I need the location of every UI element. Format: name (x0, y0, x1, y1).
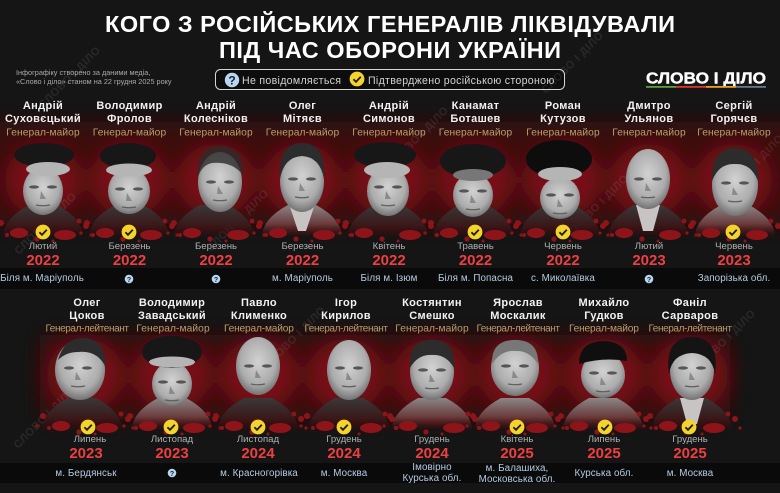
general: Клименко: Листопад (237, 434, 280, 445)
location (479, 463, 555, 485)
portrait (598, 149, 698, 242)
general: Суховєцький (0, 100, 93, 284)
general: Сарваров: м. Москва (667, 468, 714, 479)
general: Суховєцький: Біля м. Маріуполь (0, 273, 84, 284)
general: Горячєв: Червень (715, 241, 753, 252)
general: Кутузов (510, 100, 610, 284)
general: Горячєв: Запорізька обл. (698, 273, 770, 284)
general: Мітяєв (252, 100, 352, 284)
portrait (510, 140, 610, 242)
general: Сарваров (642, 297, 742, 479)
general: Кирилов: 2024 (327, 445, 361, 462)
general: Боташев (423, 100, 523, 284)
red blood background: top row (0, 122, 780, 224)
portrait (553, 341, 653, 436)
general: Кирилов: Генерал-лейтенант (304, 324, 388, 334)
general: Симонов: Генерал-майор (352, 128, 426, 138)
general: Колесніков: 2022 (199, 252, 233, 269)
location: Курська обл. (403, 473, 461, 484)
general: Симонов: Квітень (373, 241, 405, 252)
general: Кутузов: Кутузов (540, 113, 586, 125)
general: Суховєцький: Генерал-майор (6, 128, 80, 138)
location strip: bottom row (0, 463, 780, 483)
watermarks: СЛОВО І ДІЛО (539, 29, 606, 96)
confirmed icon (251, 420, 265, 434)
portrait (166, 146, 266, 242)
general: Боташев: Біля м. Попасна (438, 273, 513, 284)
confirmed icon (726, 225, 740, 239)
general: Мітяєв: 2022 (286, 252, 319, 269)
general: Сарваров: 2025 (673, 445, 707, 462)
general: Горячєв: 2023 (717, 252, 751, 269)
portrait (299, 340, 399, 436)
general: Колесніков: Генерал-майор (179, 128, 253, 138)
general: Гудков: 2025 (587, 445, 621, 462)
general: Мітяєв: Мітяєв (283, 113, 322, 125)
general: Клименко: Клименко (231, 310, 287, 322)
watermarks: СЛОВО І ДІЛО (564, 172, 631, 239)
legend: not reported: Не повідомляється (242, 75, 341, 87)
general: Колесніков: Колесніков (184, 113, 248, 125)
general: Гудков (553, 297, 653, 479)
general: Завадський: 2023 (155, 445, 189, 462)
general: Симонов (338, 100, 438, 284)
general: Москалик: Генерал-лейтенант (476, 324, 560, 334)
general: Фролов: Березень (108, 241, 151, 252)
general: Цоков: Генерал-лейтенант (45, 324, 129, 334)
general: Кирилов: Ігор (335, 297, 357, 309)
general: Боташев: Боташев (450, 113, 501, 125)
watermarks: СЛОВО І ДІЛО (384, 104, 451, 171)
general: Сарваров: Сарваров (662, 310, 718, 322)
general: Кутузов: с. Миколаївка (531, 273, 595, 284)
general: Кутузов: 2022 (546, 252, 580, 269)
legend (216, 70, 564, 90)
portrait (208, 337, 308, 436)
general: Смешко: Костянтин (402, 297, 462, 309)
general: Горячєв (685, 100, 780, 284)
general: Симонов: 2022 (372, 252, 406, 269)
general: Кирилов: Кирилов (321, 310, 371, 322)
general: Кирилов (299, 297, 399, 479)
general: Завадський (122, 297, 222, 478)
watermarks: СЛОВО І ДІЛО (12, 190, 79, 257)
portrait (35, 338, 135, 436)
general: Мітяєв: Олег (289, 100, 316, 112)
general: Сарваров: Фаніл (673, 297, 707, 309)
general: Колесніков: Березень (195, 241, 237, 252)
portrait (122, 336, 222, 436)
general: Ульянов: Лютий (635, 241, 663, 252)
general: Кутузов: Генерал-майор (526, 128, 600, 138)
general: Смешко: Смешко (409, 310, 455, 322)
portrait (338, 142, 438, 242)
general: Сарваров: Генерал-лейтенант (648, 324, 732, 334)
portrait (79, 143, 179, 242)
watermarks: СЛОВО І ДІЛО (691, 307, 758, 374)
general: Фролов: 2022 (113, 252, 146, 269)
confirmed icon (122, 225, 136, 239)
confirmed icon (510, 420, 524, 434)
general: Ульянов: 2023 (632, 252, 666, 269)
general: Москалик: Ярослав (493, 297, 543, 309)
general: Мітяєв: Генерал-майор (266, 128, 339, 138)
general: Смешко: Генерал-майор (395, 324, 469, 334)
general: Завадський: Володимир (139, 297, 205, 309)
confirmed icon (36, 225, 50, 239)
general: Симонов: Симонов (363, 113, 415, 125)
legend: not reported: ? (228, 73, 236, 87)
title (105, 10, 675, 63)
general: Гудков: Липень (588, 434, 620, 445)
general: Горячєв: Генерал-майор (697, 128, 771, 138)
general: Кирилов: Грудень (326, 434, 362, 445)
confirmed icon (556, 225, 570, 239)
general: Суховєцький: Суховєцький (5, 113, 81, 125)
general: Кирилов: м. Москва (321, 468, 368, 479)
general: Гудков: Гудков (584, 310, 624, 322)
location (403, 462, 461, 484)
watermarks: СЛОВО І ДІЛО (11, 384, 78, 451)
source note: «Слово і діло» станом на 22 грудня 2025 року (16, 77, 172, 86)
location: м. Балашиха, (486, 463, 548, 474)
general: Суховєцький: Лютий (29, 241, 57, 252)
general: Мітяєв: Березень (281, 241, 324, 252)
general: Клименко: м. Красногорівка (220, 468, 298, 479)
general: Симонов: Андрій (369, 100, 409, 112)
watermarks: СЛОВО І ДІЛО (204, 187, 271, 254)
general: Горячєв: Сергій (715, 100, 753, 112)
general: Колесніков: Андрій (196, 100, 236, 112)
general: Ульянов (598, 100, 698, 284)
title: ПІД ЧАС ОБОРОНИ УКРАЇНИ (219, 37, 561, 63)
general: Мітяєв: м. Маріуполь (272, 273, 333, 284)
general: Симонов: Біля м. Ізюм (361, 273, 418, 284)
general: Фролов: Фролов (107, 113, 152, 125)
logo: СЛОВО І ДІЛО (646, 70, 766, 88)
general: Москалик: 2025 (500, 445, 534, 462)
general: Завадський: Генерал-майор (136, 324, 210, 334)
general: Суховєцький: 2022 (26, 252, 60, 269)
general: Завадський: Листопад (151, 434, 194, 445)
general: Сарваров: Грудень (672, 434, 708, 445)
title: КОГО З РОСІЙСЬКИХ ГЕНЕРАЛІВ ЛІКВІДУВАЛИ (105, 10, 675, 37)
confirmed icon (468, 225, 482, 239)
general: Суховєцький: Андрій (23, 100, 63, 112)
general: Фролов (79, 100, 179, 284)
general: Клименко: Генерал-майор (224, 324, 294, 334)
general: Москалик: Квітень (501, 434, 533, 445)
general: Цоков (35, 297, 135, 479)
general: Клименко: Павло (241, 297, 277, 309)
general: Боташев: Канамат (452, 100, 500, 112)
general: Цоков: м. Бердянськ (55, 468, 117, 479)
legend: confirmed: Підтверджено російською стороною (368, 75, 555, 87)
general: Смешко (382, 297, 482, 484)
portrait (423, 144, 523, 242)
general: Фролов: Генерал-майор (93, 128, 166, 138)
general: Ульянов: Ульянов (625, 113, 673, 125)
general: Завадський: Завадський (138, 310, 206, 322)
general: Клименко (208, 297, 308, 479)
confirmed icon (682, 420, 696, 434)
source note (16, 68, 172, 86)
portrait (0, 143, 93, 242)
general: Горячєв: Горячєв (710, 113, 758, 125)
general: Цоков: Олег (73, 297, 101, 309)
general: Клименко: 2024 (241, 445, 275, 462)
general: Боташев: Травень (457, 241, 494, 252)
general: Кутузов: Червень (544, 241, 582, 252)
watermarks: СЛОВО І ДІЛО (261, 304, 328, 371)
portrait (642, 337, 742, 436)
general: Цоков: 2023 (69, 445, 103, 462)
general: Боташев: 2022 (459, 252, 492, 269)
general: Смешко: 2024 (415, 445, 449, 462)
location: Імовірно (412, 462, 452, 473)
portrait (465, 340, 565, 436)
general: Смешко: Грудень (414, 434, 450, 445)
general: Боташев: Генерал-майор (439, 128, 512, 138)
watermarks: СЛОВО І ДІЛО (36, 44, 103, 111)
general: Гудков: Генерал-майор (569, 324, 639, 334)
location: Московська обл. (479, 474, 555, 485)
portrait (685, 148, 780, 242)
red blood background: bottom row (40, 335, 730, 419)
general: Ульянов: Дмитро (627, 100, 671, 112)
location strip: top row (0, 268, 780, 289)
general: Гудков: Михайло (579, 297, 629, 309)
confirmed icon (164, 420, 178, 434)
general: Цоков: Липень (74, 434, 106, 445)
confirmed icon (81, 420, 95, 434)
general: Цоков: Цоков (69, 310, 105, 322)
portrait (252, 143, 352, 242)
confirmed icon (337, 420, 351, 434)
general: Колесніков (166, 100, 266, 284)
general: Москалик: Москалик (490, 310, 546, 322)
general: Кутузов: Роман (545, 100, 581, 112)
general: Ульянов: Генерал-майор (612, 128, 686, 138)
general: Москалик (465, 297, 565, 485)
general: Фролов: Володимир (96, 100, 163, 112)
source note: Інфографіку створено за даними медіа, (16, 68, 150, 77)
general: Гудков: Курська обл. (575, 468, 633, 479)
portrait (382, 340, 482, 436)
confirmed icon (598, 420, 612, 434)
